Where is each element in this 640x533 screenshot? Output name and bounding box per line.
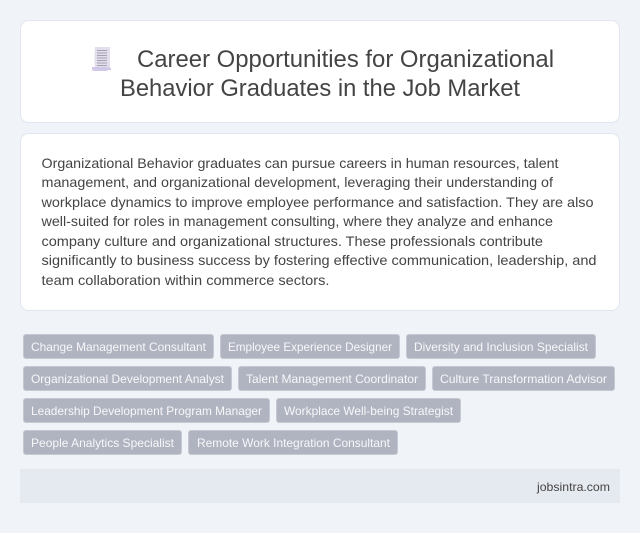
- tag: People Analytics Specialist: [24, 430, 182, 454]
- tag: Organizational Development Analyst: Organizational Development Analyst: [31, 372, 225, 386]
- title text: [120, 46, 554, 102]
- tag: Workplace Well-being Strategist: [276, 398, 460, 422]
- description paragraph: workplace dynamics to improve employee performance and satisfaction. They are also: [40, 194, 594, 210]
- icon: paper scroll: [92, 47, 111, 71]
- panel: title header: [20, 20, 620, 122]
- description paragraph: team collaboration within commerce sectors.: [42, 272, 330, 288]
- tag: Culture Transformation Advisor: Culture Transformation Advisor: [440, 372, 607, 386]
- title text: Career Opportunities for Organizational: [137, 46, 554, 73]
- tag: Remote Work Integration Consultant: [188, 430, 398, 454]
- description paragraph: significantly to business success by fostering effective communication, leadership, and: [42, 252, 596, 268]
- description paragraph: [40, 155, 596, 288]
- tag: Workplace Well-being Strategist: Workplace Well-being Strategist: [284, 404, 454, 418]
- tag: Change Management Consultant: [24, 334, 214, 358]
- tag: Leadership Development Program Manager: Leadership Development Program Manager: [31, 404, 262, 418]
- tag: Talent Management Coordinator: [238, 366, 426, 390]
- description paragraph: Organizational Behavior graduates can pursue careers in human resources, talent: [42, 155, 559, 171]
- title text: Behavior Graduates in the Job Market: [120, 75, 520, 102]
- tag: Leadership Development Program Manager: [24, 398, 270, 422]
- description paragraph: company culture and organizational structures. These professionals contribute: [42, 233, 543, 249]
- tag: Employee Experience Designer: [220, 334, 400, 358]
- description paragraph: management, and organizational development, leveraging their understanding of: [42, 174, 553, 190]
- footer text: site name: jobsintra.com: [536, 480, 610, 494]
- tag: People Analytics Specialist: People Analytics Specialist: [31, 436, 175, 450]
- tag: Diversity and Inclusion Specialist: Diversity and Inclusion Specialist: [414, 340, 589, 354]
- panel: career tags: [24, 334, 614, 454]
- tag: Culture Transformation Advisor: [432, 366, 614, 390]
- tag: Remote Work Integration Consultant: Remote Work Integration Consultant: [197, 436, 391, 450]
- footer bar: [20, 469, 620, 503]
- panel: description: [20, 134, 620, 310]
- tag: Organizational Development Analyst: [24, 366, 232, 390]
- description paragraph: well-suited for roles in management consulting, where they analyze and enhance: [40, 213, 553, 229]
- tag: Change Management Consultant: Change Management Consultant: [31, 340, 207, 354]
- tag: Talent Management Coordinator: Talent Management Coordinator: [246, 372, 418, 386]
- tag: Diversity and Inclusion Specialist: [406, 334, 596, 358]
- tag: Employee Experience Designer: Employee Experience Designer: [228, 340, 392, 354]
